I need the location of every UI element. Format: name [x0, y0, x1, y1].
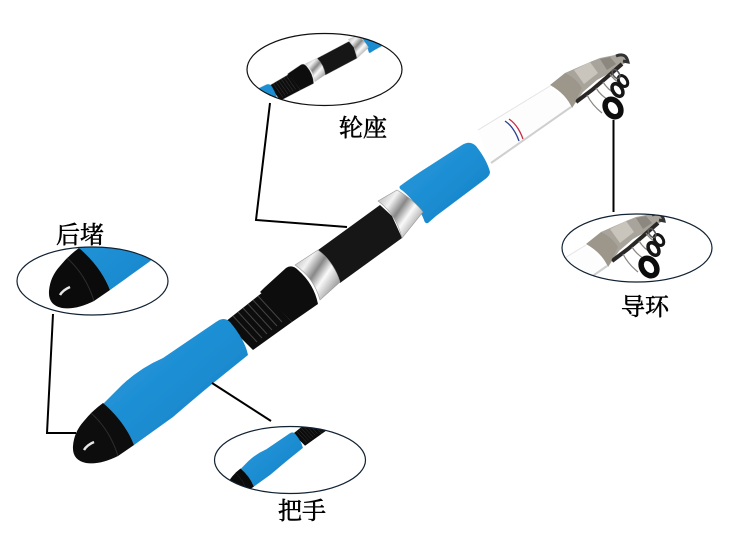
threaded section: [225, 292, 292, 350]
blue handle grip: [103, 319, 248, 445]
lower silver ring: [295, 250, 340, 300]
callout: reel seat: [246, 32, 403, 106]
black reel seat tube: [314, 205, 402, 283]
blue and red stripes: [505, 119, 523, 141]
leader line: guide ring: [612, 120, 614, 212]
blue foregrip: [399, 143, 490, 223]
callout: guide rings: [561, 213, 713, 283]
leader line: butt cap: [47, 314, 76, 433]
black butt cap: [73, 403, 134, 463]
callout: handle: [214, 426, 366, 494]
fishing rod: [73, 54, 630, 463]
label: handle: 把手: [278, 498, 326, 525]
white rod section: [478, 86, 572, 163]
threaded lock nut: [260, 266, 318, 322]
leader line: handle: [212, 383, 271, 421]
label: reel seat: 轮座: [339, 115, 387, 142]
label: butt cap: 后堵: [56, 222, 104, 249]
line guides: [576, 55, 630, 120]
tip ferrule: [550, 73, 582, 108]
callout: butt cap: [16, 246, 169, 316]
upper silver ring: [378, 190, 423, 238]
rod tip sections: [565, 54, 628, 108]
label: guide ring: 导环: [621, 294, 670, 321]
leader line: reel seat: [256, 103, 347, 227]
